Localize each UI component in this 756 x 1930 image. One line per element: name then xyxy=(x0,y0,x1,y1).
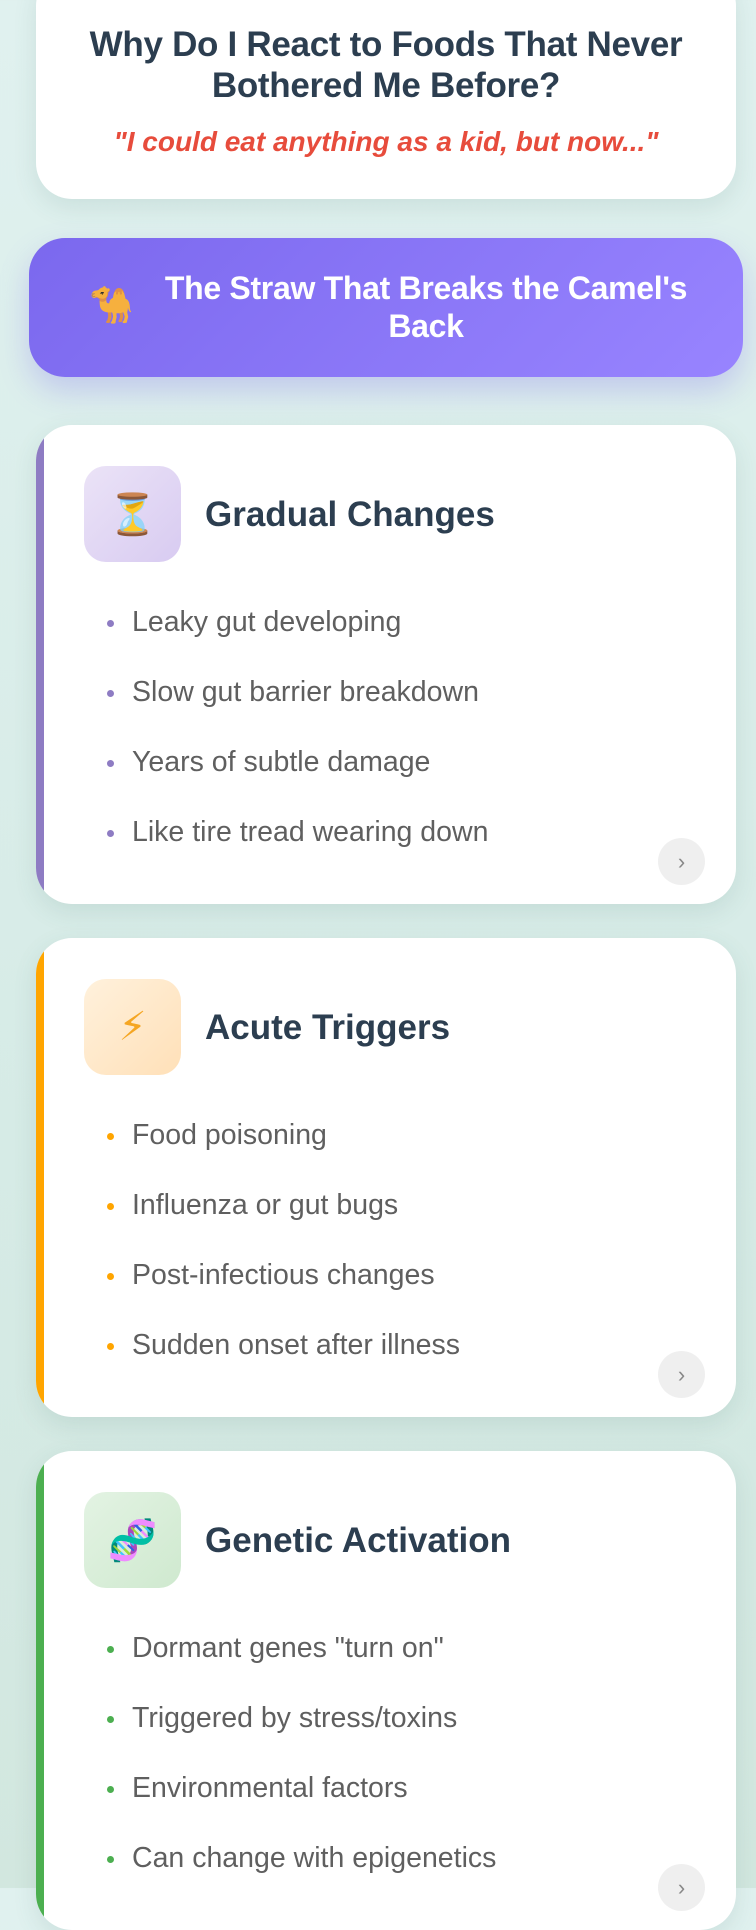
arrow button: › xyxy=(678,1362,685,1386)
heading: Genetic Activation xyxy=(205,1521,511,1560)
bullet list: Environmental factors xyxy=(132,1772,408,1804)
bullet list: Slow gut barrier breakdown xyxy=(132,676,479,708)
bullet list: Dormant genes "turn on" xyxy=(132,1632,444,1664)
bullet list: Like tire tread wearing down xyxy=(132,816,488,848)
bullet list: Leaky gut developing xyxy=(132,606,401,638)
title card xyxy=(36,0,736,199)
bullet list: Food poisoning xyxy=(132,1119,327,1151)
title: Bothered Me Before? xyxy=(212,66,560,105)
banner text: Back xyxy=(388,308,464,344)
bullet list: Influenza or gut bugs xyxy=(132,1189,398,1221)
icon: lightning: ⚡ xyxy=(118,1005,147,1049)
panel: gradual changes xyxy=(36,425,736,904)
icon: camel: 🐪 xyxy=(89,284,134,325)
icon: hourglass: ⏳ xyxy=(108,492,157,536)
title xyxy=(90,25,682,105)
heading: Acute Triggers xyxy=(205,1008,450,1047)
banner text: The Straw That Breaks the Camel's xyxy=(165,270,687,306)
arrow button xyxy=(658,838,705,885)
bullet list: Years of subtle damage xyxy=(132,746,430,778)
arrow button xyxy=(658,1864,705,1911)
panel: genetic activation xyxy=(36,1451,736,1930)
arrow button: › xyxy=(678,1874,685,1900)
bullet list: Sudden onset after illness xyxy=(132,1329,460,1361)
icon: hourglass xyxy=(84,466,181,562)
bullet list xyxy=(107,1119,460,1361)
heading: Gradual Changes xyxy=(205,495,495,534)
banner text xyxy=(165,270,687,344)
bullet list: Triggered by stress/toxins xyxy=(132,1702,457,1734)
banner xyxy=(29,238,743,377)
bullet list xyxy=(107,1632,496,1874)
subtitle quote: "I could eat anything as a kid, but now..." xyxy=(113,126,659,157)
bullet list xyxy=(107,606,488,848)
icon: lightning xyxy=(84,979,181,1075)
title: Why Do I React to Foods That Never xyxy=(90,25,682,64)
bullet list: Can change with epigenetics xyxy=(132,1842,496,1874)
icon: dna xyxy=(84,1492,181,1588)
bullet list: Post-infectious changes xyxy=(132,1259,435,1291)
panel: acute triggers xyxy=(36,938,736,1417)
arrow button: › xyxy=(678,848,685,874)
icon: dna: 🧬 xyxy=(108,1518,157,1562)
arrow button xyxy=(658,1351,705,1398)
